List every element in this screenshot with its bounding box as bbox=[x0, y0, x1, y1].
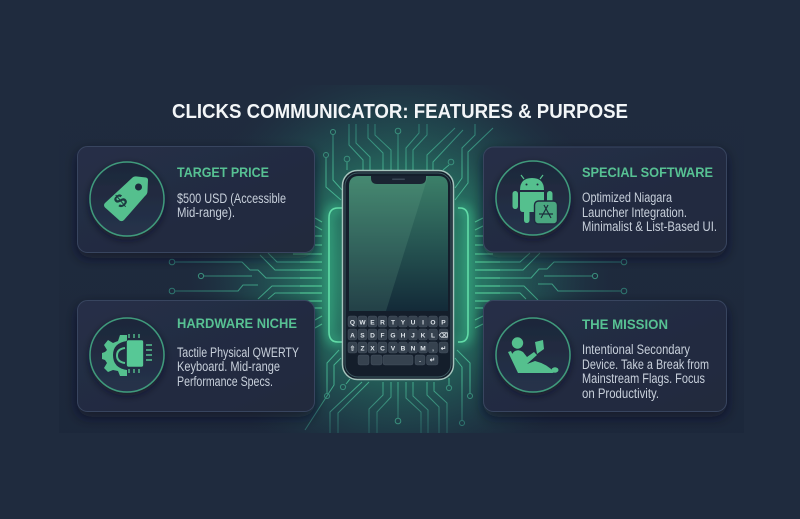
text: the mission bbox=[582, 342, 709, 401]
keyboard: . bbox=[419, 357, 421, 364]
circuit traces: bottom bbox=[305, 350, 472, 433]
text: special software: Optimized Niagara bbox=[582, 190, 672, 205]
central green glow bbox=[185, 85, 615, 433]
text: the mission: Mainstream Flags. Focus bbox=[582, 371, 705, 386]
panel: special software bbox=[484, 147, 726, 252]
keyboard: , bbox=[432, 346, 434, 352]
circuit traces: right bbox=[475, 218, 627, 328]
glowing brackets around phone bbox=[329, 208, 468, 342]
keyboard: Y bbox=[401, 320, 406, 326]
keyboard bbox=[348, 316, 449, 365]
screen reflection bbox=[349, 176, 428, 311]
keyboard: L bbox=[431, 332, 435, 340]
keyboard: ↵ bbox=[441, 346, 446, 352]
speaker bbox=[392, 178, 405, 180]
panel: the mission bbox=[484, 300, 726, 412]
keyboard: W bbox=[359, 320, 366, 326]
notch bbox=[371, 176, 426, 184]
keyboard: O bbox=[430, 320, 436, 326]
text: hardware niche: Performance Specs. bbox=[177, 374, 273, 389]
text: the mission: Device. Take a Break from bbox=[582, 357, 709, 372]
heading: the mission: THE MISSION bbox=[582, 317, 668, 332]
icon: android and app store bbox=[496, 161, 570, 235]
icon: price tag: $ bbox=[110, 190, 132, 213]
keyboard: Q bbox=[350, 320, 355, 326]
keyboard: A bbox=[350, 332, 355, 340]
keyboard: C bbox=[380, 346, 385, 352]
keyboard: I bbox=[422, 320, 424, 326]
keyboard: T bbox=[391, 320, 395, 326]
keyboard: M bbox=[420, 346, 426, 352]
keyboard: U bbox=[411, 320, 416, 326]
text: hardware niche: Tactile Physical QWERTY bbox=[177, 345, 299, 360]
text: the mission: Intentional Secondary bbox=[582, 342, 690, 357]
keyboard: B bbox=[401, 346, 406, 352]
keyboard: K bbox=[421, 332, 426, 340]
keyboard: Z bbox=[360, 346, 365, 352]
text: hardware niche bbox=[177, 345, 299, 389]
keyboard: ⌫ bbox=[438, 332, 449, 340]
text: target price: Mid-range). bbox=[177, 205, 235, 220]
keyboard: ⇧ bbox=[350, 344, 356, 352]
phone bbox=[342, 170, 454, 380]
text: special software: Launcher Integration. bbox=[582, 205, 687, 220]
icon: gear and chip bbox=[90, 318, 164, 392]
keyboard: N bbox=[411, 346, 416, 352]
keyboard: H bbox=[401, 332, 406, 340]
heading: special software: SPECIAL SOFTWARE bbox=[582, 165, 713, 180]
text: special software: Minimalist & List-Based UI. bbox=[582, 219, 717, 234]
icon: person reading bbox=[496, 318, 570, 392]
keyboard: G bbox=[390, 332, 396, 340]
keyboard: F bbox=[380, 332, 385, 340]
keyboard: D bbox=[370, 332, 375, 340]
phone screen bbox=[349, 176, 448, 311]
keyboard: J bbox=[411, 332, 415, 340]
circuit traces: top bbox=[324, 124, 493, 200]
circuit traces: left bbox=[169, 218, 322, 328]
keyboard: R bbox=[380, 320, 385, 326]
text: special software bbox=[582, 190, 717, 234]
text: the mission: on Productivity. bbox=[582, 386, 659, 401]
phone inner bezel bbox=[345, 173, 451, 377]
panel: hardware niche bbox=[78, 300, 314, 412]
text: target price bbox=[177, 191, 286, 220]
icon: price tag bbox=[90, 162, 164, 236]
text: hardware niche: Keyboard. Mid-range bbox=[177, 359, 280, 374]
keyboard: ↵ bbox=[430, 357, 435, 364]
heading: target price: TARGET PRICE bbox=[177, 165, 269, 180]
keyboard: V bbox=[391, 346, 396, 352]
heading: hardware niche: HARDWARE NICHE bbox=[177, 316, 297, 331]
inner backdrop panel bbox=[59, 85, 744, 433]
panel: target price bbox=[78, 146, 314, 252]
keyboard: X bbox=[370, 346, 375, 352]
phone body bbox=[342, 170, 454, 380]
keyboard: P bbox=[441, 320, 446, 326]
title: CLICKS COMMUNICATOR: FEATURES & PURPOSE bbox=[172, 100, 628, 123]
keyboard: S bbox=[360, 332, 365, 340]
text: target price: $500 USD (Accessible bbox=[177, 191, 286, 206]
keyboard: E bbox=[370, 320, 375, 326]
